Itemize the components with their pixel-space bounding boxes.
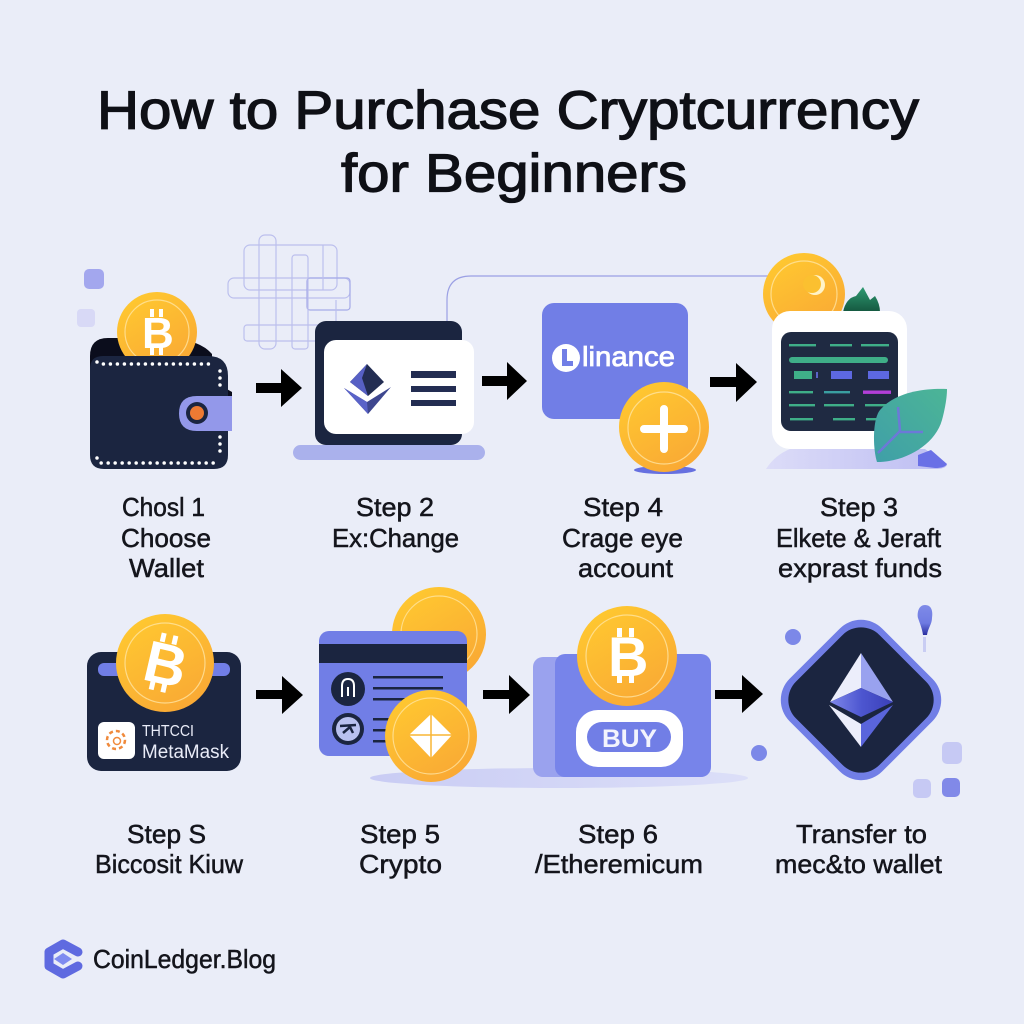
buy button: BUY bbox=[602, 725, 657, 753]
menu lines bbox=[411, 371, 456, 406]
bitcoin coin: B bbox=[608, 625, 648, 688]
bitcoin coin in wallet bbox=[117, 292, 197, 372]
floor shadow under row two bbox=[370, 768, 748, 788]
binance logo: linance bbox=[582, 341, 675, 372]
label: step 1: Wallet bbox=[129, 553, 205, 583]
label: step 2: Ex:Change bbox=[332, 523, 459, 553]
label: step 5 bbox=[359, 819, 442, 879]
row icons bbox=[331, 672, 365, 745]
title: How to Purchase Cryptcurrency bbox=[97, 80, 919, 140]
icon: deposit monitor bbox=[763, 253, 947, 469]
bitcoin coin bbox=[577, 606, 677, 706]
title bbox=[97, 80, 919, 204]
icon: ethereum diamond bbox=[768, 607, 954, 793]
label: step 3 bbox=[776, 492, 942, 583]
arrow 5 bbox=[483, 675, 530, 714]
leaf bbox=[874, 389, 947, 462]
label: step 6: /Etheremicum bbox=[535, 849, 703, 879]
screen rows bbox=[789, 344, 891, 420]
arrow 1 bbox=[256, 369, 302, 407]
label: step 2 bbox=[332, 492, 459, 553]
icon: hexagon mark bbox=[49, 944, 78, 974]
label: step 5: Step 5 bbox=[360, 819, 440, 849]
bitcoin coin on card: B bbox=[138, 628, 193, 701]
decorative squares near wallet bbox=[77, 269, 104, 327]
icon: metamask card bbox=[87, 614, 241, 771]
text lines bbox=[373, 676, 443, 742]
metamask tile bbox=[98, 722, 135, 759]
label: step S bbox=[95, 819, 243, 879]
label: step 3: Step 3 bbox=[820, 492, 898, 522]
icon: crypto card with coins bbox=[319, 587, 486, 782]
label: step 4: Step 4 bbox=[583, 492, 663, 522]
label: step 4: Crage eye bbox=[562, 523, 683, 553]
arrow 3 bbox=[710, 363, 757, 402]
ethereum coin bbox=[385, 690, 477, 782]
label: step 1: Chosl 1 bbox=[122, 492, 205, 522]
connector line from exchange to deposit bbox=[447, 276, 772, 322]
label: step 1 bbox=[121, 492, 211, 583]
label: transfer to wallet: mec&to wallet bbox=[775, 849, 943, 879]
icon: binance account bbox=[542, 303, 709, 474]
label: step 6 bbox=[535, 819, 703, 879]
label: step 3: Elkete & Jeraft bbox=[776, 523, 942, 553]
bitcoin coin in wallet: B bbox=[142, 309, 174, 358]
ethereum crystal bbox=[829, 653, 893, 747]
label: step 2: Step 2 bbox=[356, 492, 434, 522]
label: step 4 bbox=[562, 492, 683, 583]
decorative grid of outlined shapes bbox=[228, 235, 350, 349]
label: step 5: Crypto bbox=[359, 849, 442, 879]
label: step 3: exprast funds bbox=[778, 553, 942, 583]
ethereum mark bbox=[344, 364, 391, 414]
label: step 4: account bbox=[578, 553, 674, 583]
label: transfer to wallet: Transfer to bbox=[796, 819, 927, 849]
label: step S: Step S bbox=[127, 819, 206, 849]
bitcoin coin on card bbox=[116, 614, 214, 712]
icon: buy panel bbox=[533, 606, 711, 777]
label: step 6: Step 6 bbox=[578, 819, 658, 849]
buy button bbox=[576, 710, 683, 767]
label: step 1: Choose bbox=[121, 523, 211, 553]
icon: metamask card: THTCCI bbox=[142, 723, 194, 740]
brand logo: CoinLedger.Blog bbox=[93, 944, 276, 974]
title: for Beginners bbox=[341, 144, 687, 204]
label: transfer to wallet bbox=[775, 819, 943, 879]
plus coin bbox=[619, 382, 709, 472]
arrow 2 bbox=[482, 362, 527, 400]
icon: wallet with bitcoin bbox=[90, 292, 232, 469]
arrow 4 bbox=[256, 676, 303, 714]
label: step S: Biccosit Kiuw bbox=[95, 849, 243, 879]
icon: exchange laptop bbox=[293, 321, 485, 460]
coin behind monitor bbox=[763, 253, 845, 335]
wallet clasp bbox=[179, 396, 232, 431]
arrow 6 bbox=[715, 675, 763, 713]
icon: metamask card: MetaMask bbox=[142, 742, 229, 763]
decorative dots and squares near diamond bbox=[751, 605, 962, 798]
